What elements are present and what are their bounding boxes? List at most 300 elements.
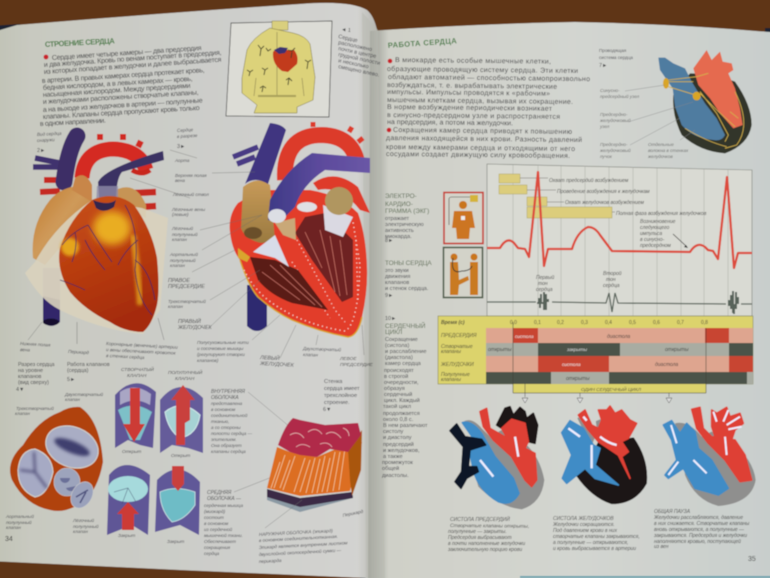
panel: valve plane cross-section 4: на уровне [18, 368, 43, 374]
heart sound labels: Второй [603, 270, 622, 277]
row labels: Время (с) [441, 320, 465, 326]
captions: phases: ОБЩАЯ ПАУЗА [654, 509, 691, 515]
illustration: heart wall block 6: Стенка [324, 379, 343, 385]
callout: next impulse [640, 219, 688, 249]
text block: heart work paragraphs: В норме возбуждение периодически возникает [387, 103, 553, 113]
text and icon: ECG: и стенок сердца. [385, 286, 429, 292]
labels: cross-section heart: полулунный [172, 231, 198, 237]
illustration: heart wall block 6 [259, 379, 364, 564]
labels: exterior heart [20, 131, 178, 360]
captions: phases: и кровь выбрасывается в артерии [553, 546, 636, 552]
captions: phases: Створчатые клапаны открыты, [450, 523, 529, 530]
captions: phases [447, 509, 750, 553]
captions: phases: закрываются. Предсердия и желудочки [653, 533, 747, 539]
captions: phases: полулунные — закрыты. [448, 529, 507, 535]
labels: cross-section heart: Лёгочные вены [171, 207, 206, 212]
text block: heart work paragraphs: обладают автоматией — способностью самопроизвольно [388, 73, 590, 83]
text and icon: ECG: ЭЛЕКТРО- [385, 193, 417, 200]
left text: cardiac cycle: СЕРДЕЧНЫЙ [385, 321, 426, 330]
page number: 35 [748, 556, 756, 563]
valve: open semilunar [160, 385, 203, 458]
text block: heart work paragraphs: сосудами создает движущую силу кровообращения. [386, 150, 570, 160]
callout: next impulse: следующего [640, 225, 669, 231]
time axis: 0,4 [605, 320, 612, 326]
valve: open atrioventricular [115, 383, 156, 454]
labels: cross-section heart: и сосочковые мышцы [197, 346, 244, 351]
captions: phases: створчатые клапаны закрываются, [553, 534, 640, 540]
left text: cardiac cycle: промежуток [382, 460, 413, 466]
caption 1: ◄ 1 [341, 27, 351, 34]
row: semilunar valves: открыты [566, 376, 590, 382]
illustration: conduction system heart 7: Проводящая [599, 48, 627, 53]
captions: phases: в них снижается. Створчатые клапаны [654, 521, 750, 527]
time axis: 0,3 [581, 320, 588, 326]
illustration: heart wall block 6: в основном соединительнотканная. [259, 534, 338, 543]
labels: cross-section heart: Двухстворчатый [302, 345, 342, 352]
labels: cross-section heart: ПРЕДСЕРДИЕ [168, 284, 205, 290]
caption 1 [338, 27, 381, 79]
valve: open semilunar: Открыт [171, 453, 191, 458]
panel: valve plane cross-section 4 [5, 362, 105, 543]
illustration: conduction system heart 7: желудочковый [599, 147, 631, 153]
labels: cross-section heart: клапан [303, 352, 318, 358]
labels: cross-section heart: клапанов) [197, 358, 219, 363]
heart: atrial systole [450, 407, 544, 509]
captions: phases: Желудочки сокращаются. [552, 522, 615, 528]
page bottom edge [520, 576, 770, 578]
text block: heart work paragraphs: в синусно-предсердном узле и распространяется [387, 112, 560, 121]
labels: cross-section heart: ПРЕДСЕРДИЕ [340, 362, 374, 368]
labels: cross-section heart: ЖЕЛУДОЧЕК [259, 361, 295, 369]
caption 1: Сердце [338, 34, 358, 44]
pale pericardium [25, 200, 168, 334]
time axis: 0,6 [653, 320, 660, 326]
labels: cross-section heart [130, 127, 374, 369]
text block: heart wall layers: клапаны сердца [211, 449, 246, 454]
text block: heart wall layers: сердечная мышца [204, 503, 243, 508]
row labels: ЖЕЛУДОЧКИ [440, 362, 474, 368]
illustration: conduction system heart 7: 7► [599, 63, 607, 69]
valve: closed semilunar: Закрыт [167, 539, 184, 544]
labels: exterior heart: Нижняя полая [20, 341, 51, 348]
one cycle bracket [513, 322, 706, 393]
row: atrioventricular valves: открыты [665, 347, 689, 353]
panel: valve plane cross-section 4: клапан [73, 529, 88, 534]
row labels: клапаны [441, 377, 461, 383]
phase bars: Полная фаза возбуждения желудочков [616, 211, 707, 217]
row: atrioventricular valves [486, 343, 753, 356]
text and icon: ECG: клапанов [385, 280, 409, 286]
labels: cross-section heart: клапан [170, 263, 185, 268]
heart sound labels: Первый [536, 274, 554, 281]
illustration: heart wall block 6: сердца имеет [324, 386, 360, 392]
left text: cardiac cycle: происходят [384, 368, 414, 374]
row: atria [486, 328, 753, 343]
text and icon: ECG: активность [385, 228, 414, 234]
captions: phases: в почти наполненные желудочки [448, 541, 525, 547]
labels: cross-section heart: 3► [177, 144, 185, 150]
text block: heart wall layers: состоит [204, 515, 224, 520]
left text: cardiac cycle: В нем различают [383, 423, 428, 429]
labels: exterior heart: в стенках сердца [106, 353, 145, 360]
row labels: Створчатые [441, 344, 473, 350]
text block: heart work paragraphs: давления находящейся в них крови. Разность давлений [386, 134, 582, 144]
captions: phases: наполняются кровью, поступающей [654, 538, 741, 545]
panel: valve operation diagrams 5: КЛАПАН [175, 376, 195, 382]
labels: cross-section heart: Сердце [177, 127, 194, 133]
phase bars: Охват предсердий возбуждением [549, 177, 629, 184]
panel: valve plane cross-section 4: полулунный [6, 519, 32, 525]
heart sound labels: сердца [536, 287, 553, 293]
time axis: 0,2 [557, 320, 564, 326]
illustration: heart wall block 6: Эпикард является внутренним листком [259, 540, 348, 550]
captions: phases: а полулунные — открываются, [553, 540, 628, 546]
phase bars: Проведение возбуждения к желудочкам [557, 189, 650, 195]
upper vena cava [245, 123, 286, 184]
labels: exterior heart: вена [20, 347, 31, 353]
row labels: клапаны [441, 349, 461, 355]
text and icon: ECG: электрическую [385, 222, 424, 228]
icon: ECG patient [444, 192, 483, 244]
illustration: conduction system heart 7: Синусно- [600, 88, 620, 93]
captions: phases: из вен [654, 544, 669, 550]
text block: heart wall layers: ОБОЛОЧКА — [207, 496, 242, 502]
labels: exterior heart: снаружи [37, 137, 55, 143]
left book page [0, 3, 385, 578]
text block: heart wall layers: полости сердца — [211, 431, 253, 436]
captions: phases: Под давлением крови в них [553, 528, 617, 534]
heart exterior illustration [25, 134, 168, 334]
illustration: heart wall block 6: трехслойное [324, 392, 357, 399]
text block: heart wall layers: сокращения [204, 545, 231, 550]
left text: cardiac cycle: в строгой [384, 373, 408, 380]
text block: heart work paragraphs: мышечным клеткам сердца, вызывая их сокращение. [387, 97, 573, 106]
labels: exterior heart: Вид сердца [37, 131, 62, 137]
text and icon: ECG: ГРАММА (ЭКГ) [385, 208, 429, 215]
text block: heart wall layers: представлена [211, 401, 243, 406]
panel: valve plane cross-section 4: клапан [65, 397, 80, 402]
left text: cardiac cycle: а также [383, 454, 403, 460]
labels: cross-section heart: полулунный [170, 257, 196, 263]
illustration: conduction system heart 7: Предсердно- [600, 112, 628, 117]
text and icon: ECG: 8► [385, 238, 393, 244]
text block: intro: в одном направлении. [40, 118, 106, 128]
left text: cardiac cycle: систолу [383, 429, 403, 435]
left text: cardiac cycle: и желудочков, [383, 448, 420, 454]
time axis [510, 320, 708, 326]
labels: cross-section heart: Лёгочный [171, 225, 194, 231]
heart: ventricular systole [562, 406, 646, 503]
caption 1: почти в центре [338, 46, 377, 60]
left text: cardiac cycle: цикл. Каждый [384, 397, 420, 404]
panel: valve plane cross-section 4: клапан [6, 525, 21, 530]
labels: cross-section heart: Верхняя полая [175, 173, 207, 178]
left text: cardiac cycle: и диастолу [383, 435, 412, 441]
text block: heart work paragraphs: Сокращения камер сердца приводят к повышению [393, 127, 572, 136]
panel: valve plane cross-section 4: Лёгочный [72, 517, 95, 523]
labels: exterior heart: и вены обеспечивают кровоток [106, 347, 177, 356]
labels: cross-section heart: Полусухожильные нити [197, 340, 249, 345]
phonocardiogram trace [487, 293, 752, 312]
panel: valve plane cross-section 4: 4▼ [16, 387, 24, 393]
time axis: 0,5 [629, 320, 636, 326]
illustration: heart wall block 6: НАРУЖНАЯ ОБОЛОЧКА (эпикард) [259, 528, 333, 537]
illustration: conduction system heart 7: предсердный узел [600, 93, 640, 99]
captions: phases: СИСТОЛА ПРЕДСЕРДИЙ [450, 515, 510, 523]
labels: exterior heart: Перикард [68, 349, 89, 355]
labels: cross-section heart: Трехстворчатый [168, 298, 206, 304]
panel: valve plane cross-section 4: Двухстворчатый [64, 391, 103, 397]
labels: cross-section heart: ЖЕЛУДОЧЕК [177, 325, 213, 331]
heart sound labels: тон [606, 277, 616, 283]
time axis: 0,0 [510, 320, 517, 326]
row: atrioventricular valves: открыты [488, 347, 512, 353]
text and icon: ECG: 9► [385, 293, 393, 299]
row: ventricles: диастола [655, 362, 678, 368]
illustration: conduction system heart 7: узел [599, 124, 610, 129]
text and icon: ECG [385, 192, 483, 299]
left text: cardiac cycle: очередности, [384, 380, 419, 386]
labels: cross-section heart: ЛЕВЫЙ [259, 353, 280, 362]
heading: heart structure: СТРОЕНИЕ СЕРДЦА [45, 36, 116, 49]
text block: heart work paragraphs: образующие проводящую систему сердца. Эти клетки [387, 65, 578, 75]
left text: cardiac cycle [382, 316, 428, 479]
illustration: conduction system heart 7: Отдельные [648, 142, 674, 147]
pulmonary trunk purple [268, 153, 370, 222]
text and icon: ECG: миокарда. [385, 234, 412, 240]
white valves [253, 235, 289, 267]
valve: open atrioventricular: Открыт [122, 449, 142, 454]
captions: phases: вновь открываются, а полулунные — [654, 527, 745, 533]
panel: valve operation diagrams 5: КЛАПАН [127, 373, 147, 379]
left text: cardiac cycle: ЦИКЛ [385, 329, 402, 336]
captions: phases: СИСТОЛА ЖЕЛУДОЧКОВ [553, 516, 614, 522]
row: ventricles [486, 356, 753, 372]
panel: valve operation diagrams 5: (сердца) [67, 368, 89, 374]
labels: cross-section heart: Лёгочный ствол [172, 191, 209, 197]
left ventricle chamber [295, 213, 353, 302]
ECG chart [487, 164, 752, 384]
row labels: ПРЕДСЕРДИЯ [441, 333, 477, 339]
caption 1: грудной полости [338, 51, 381, 67]
text block: heart wall layers [204, 389, 310, 556]
text block: heart wall layers: (миокард) [204, 509, 226, 514]
illustration: conduction system heart 7: желудочков [647, 154, 673, 159]
text block: intro: клапаны. Клапаны сердца пропускают кровь только [43, 105, 200, 121]
text block: heart work paragraphs [386, 56, 590, 160]
one cycle bracket: ОДИН СЕРДЕЧНЫЙ ЦИКЛ [581, 385, 642, 393]
valve: closed atrioventricular: Закрыт [118, 533, 135, 538]
left text: cardiac cycle: предсердий [383, 441, 414, 448]
gutter shadow [362, 12, 385, 578]
text block: heart wall layers: а со стороны [211, 425, 241, 430]
illustration: heart wall block 6: 6▼ [323, 407, 331, 413]
text block: intro: насыщенная кислородом. Между предсердиями [43, 83, 191, 99]
panel: valve plane cross-section 4: Трехстворчатый [16, 405, 54, 411]
heart phase diagrams [450, 406, 756, 509]
text block: heart wall layers: Обеспечивает [204, 539, 236, 544]
panel: valve operation diagrams 5: Работа клапанов [67, 362, 110, 368]
labels: cross-section heart: ПРАВОЕ [168, 278, 190, 284]
left text: cardiac cycle: Сокращение [385, 337, 418, 343]
text block: intro [40, 45, 222, 128]
panel: valve operation diagrams 5 [67, 362, 203, 544]
text block: heart work paragraphs: крови между камерами сердца и отходящими от него [386, 144, 575, 153]
text block: heart work paragraphs: возбуждаться, т. е. вырабатывать электрические [387, 81, 557, 91]
phase bars: Охват желудочков возбуждением [565, 200, 644, 206]
callout: next impulse: в синусно- [640, 237, 665, 243]
illustration: conduction system heart 7 [599, 48, 752, 159]
left text: cardiac cycle: 10► [385, 316, 396, 322]
valve: closed atrioventricular [107, 465, 150, 538]
labels: cross-section heart: клапан [168, 304, 183, 309]
text block: heart wall layers: тканью, [211, 419, 229, 424]
callout: next impulse: импульса [640, 231, 662, 237]
text block: heart wall layers: эпителием. [211, 437, 237, 442]
text block: intro: в артерии. В правых камерах сердца протекает кровь, [42, 67, 205, 85]
illustration: man in shirt with heart [226, 21, 332, 117]
row: ventricles: систола [562, 362, 581, 367]
panel: right page — heart function [382, 36, 756, 563]
text block: intro: а на выходе из желудочков в артерии — полулунные [43, 98, 203, 114]
heart sound labels: тон [538, 281, 548, 287]
text block: heart wall layers: в основном [204, 521, 229, 526]
row labels [440, 320, 477, 383]
labels: cross-section heart: (левые) [172, 212, 189, 217]
heading: heart work: РАБОТА СЕРДЦА [388, 36, 457, 50]
cardiac cycle table [438, 316, 753, 403]
left text: cardiac cycle: камер сердца [385, 361, 422, 367]
row: atria: диастола [607, 334, 630, 340]
panel: valve operation diagrams 5: 5► [67, 377, 75, 383]
labels: cross-section heart: ПРАВЫЙ [178, 317, 201, 325]
panel: valve plane cross-section 4: Разрез сердца [18, 362, 54, 368]
arrows to phases [522, 384, 672, 403]
time axis: 0,7 [677, 320, 684, 326]
caption 1: и несколько [338, 58, 369, 70]
labels: cross-section heart: в разрезе [177, 133, 198, 139]
row labels: Полулунные [441, 372, 470, 378]
text block: heart work paragraphs: на предсердия, а потом на желудочки. [387, 119, 513, 127]
heart: general pause [663, 407, 756, 506]
tan right atrium [241, 180, 275, 243]
right ventricle chamber [250, 257, 328, 310]
text block: heart work paragraphs: импульсы. Импульсы проводятся к «рабочим» [387, 88, 550, 98]
panel: valve operation diagrams 5: СТВОРЧАТЫЙ [121, 365, 154, 373]
illustration: conduction system heart 7: желудочковый [599, 117, 631, 123]
labels: exterior heart: 2► [37, 148, 45, 154]
labels: cross-section heart: (регулируют створки [197, 352, 245, 357]
text block: intro: Сердце имеет четыре камеры — два предсердия [52, 45, 202, 62]
left text: cardiac cycle: (диастола) [385, 355, 413, 361]
row: atria: систола [515, 334, 534, 339]
panel: valve plane cross-section 4: (вид сверху) [18, 380, 49, 386]
row: semilunar valves [486, 372, 753, 384]
phase bars [499, 174, 707, 218]
text block: heart wall layers: соединительной [211, 412, 248, 418]
captions: phases: Предсердия выбрасывают [448, 535, 512, 541]
panel: valve plane cross-section 4: 34 [5, 536, 13, 543]
text block: heart wall layers: Она образует [211, 443, 242, 448]
illustration: heart wall block 6: двухслойной околосердечной сумки — [259, 547, 342, 557]
labels: cross-section heart: вена [175, 178, 185, 183]
text and icon: ECG: отражает [385, 216, 410, 222]
text and icon: ECG: КАРДИО- [385, 201, 413, 208]
left text: cardiac cycle: общей [382, 465, 399, 472]
labels: cross-section heart: Аортальный [169, 251, 198, 257]
heart sound labels: сердца [603, 283, 620, 289]
heart sound labels [536, 270, 622, 293]
valve: closed semilunar [155, 466, 200, 544]
icon: stethoscope examination [444, 248, 482, 298]
callout: next impulse: предсердном [640, 243, 671, 249]
panel: valve plane cross-section 4: клапан [15, 411, 30, 416]
panel: valve plane cross-section 4: клапанов [18, 374, 41, 380]
caption 1: смещено влево. [338, 64, 380, 79]
text block: heart wall layers: ОБОЛОЧКА [211, 395, 239, 401]
time axis: 0,1 [534, 320, 541, 326]
text block: heart wall layers: СРЕДНЯЯ [207, 490, 232, 496]
lower vena cava [43, 268, 60, 326]
labels: exterior heart: Коронарные (венечные) артерии [106, 341, 178, 350]
text block: intro: и желудочками расположены створчатые клапаны, [43, 89, 199, 106]
text block: heart wall layers: ВНУТРЕННЯЯ [211, 389, 245, 395]
left text: cardiac cycle: (систола) [385, 343, 409, 349]
text block: intro: и два желудочка. Кровь по венам поступает в предсердия, [44, 50, 222, 69]
labels: cross-section heart: клапан [172, 237, 187, 242]
left text: cardiac cycle: такой цикл [383, 403, 411, 410]
text and icon: ECG: ТОНЫ СЕРДЦА [385, 260, 432, 267]
panel: valve plane cross-section 4: Аортальный [5, 513, 34, 519]
illustration: heart wall block 6: строение. [324, 400, 350, 406]
right book page [368, 22, 770, 578]
text and icon: ECG: это звуки [385, 268, 409, 274]
panel: valve operation diagrams 5: ПОЛУЛУННЫЙ [168, 368, 203, 376]
text block: intro: из которых попадает в желудочки и далее выбрасывается [44, 56, 222, 76]
panel: valve plane cross-section 4: полулунный [73, 523, 99, 529]
text block: heart wall layers: в основном [211, 407, 236, 412]
labels: cross-section heart: ЛЕВОЕ [339, 356, 357, 362]
left text: cardiac cycle: сердечный [384, 391, 412, 398]
callout: next impulse: Возникновение [640, 219, 676, 225]
illustration: heart wall block 6: Перикард [342, 509, 364, 518]
left text: cardiac cycle: около 0,8 с. [383, 417, 414, 423]
text and icon: ECG: движения [385, 274, 410, 280]
text block: heart wall layers: мышечной ткани. [204, 532, 243, 538]
captions: phases: заключительную порцию крови [447, 547, 522, 553]
illustration: conduction system heart 7: пучок [600, 154, 613, 159]
labels: cross-section heart: Аорта [174, 158, 190, 163]
text block: heart wall layers: сердца [204, 551, 220, 556]
captions: phases: Желудочки расслабляются, давление [653, 515, 743, 521]
ECG trace [487, 172, 752, 268]
text block: heart work paragraphs: В миокарде есть особые мышечные клетки, [395, 56, 551, 66]
text block: intro: бедная кислородом, а в левых камерах — кровь, [43, 75, 193, 92]
caption 1: расположено [338, 40, 373, 53]
illustration: conduction system heart 7: волокна в стенках [648, 148, 689, 153]
text block: heart wall layers: из сердечной [204, 526, 233, 532]
illustration: conduction system heart 7: Предсердно- [600, 142, 628, 147]
left text: cardiac cycle: продолжается [383, 411, 420, 417]
panel: left page — heart structure [5, 21, 381, 564]
left text: cardiac cycle: диастолы. [382, 473, 409, 479]
time axis: 0,8 [701, 320, 708, 326]
left text: cardiac cycle: и расслабление [385, 349, 427, 355]
left text: cardiac cycle: образуя [384, 386, 405, 392]
heart cross-section illustration [230, 122, 370, 337]
illustration: conduction system heart 7: система сердца [599, 55, 633, 60]
row: atrioventricular valves: закрыты [566, 347, 588, 352]
